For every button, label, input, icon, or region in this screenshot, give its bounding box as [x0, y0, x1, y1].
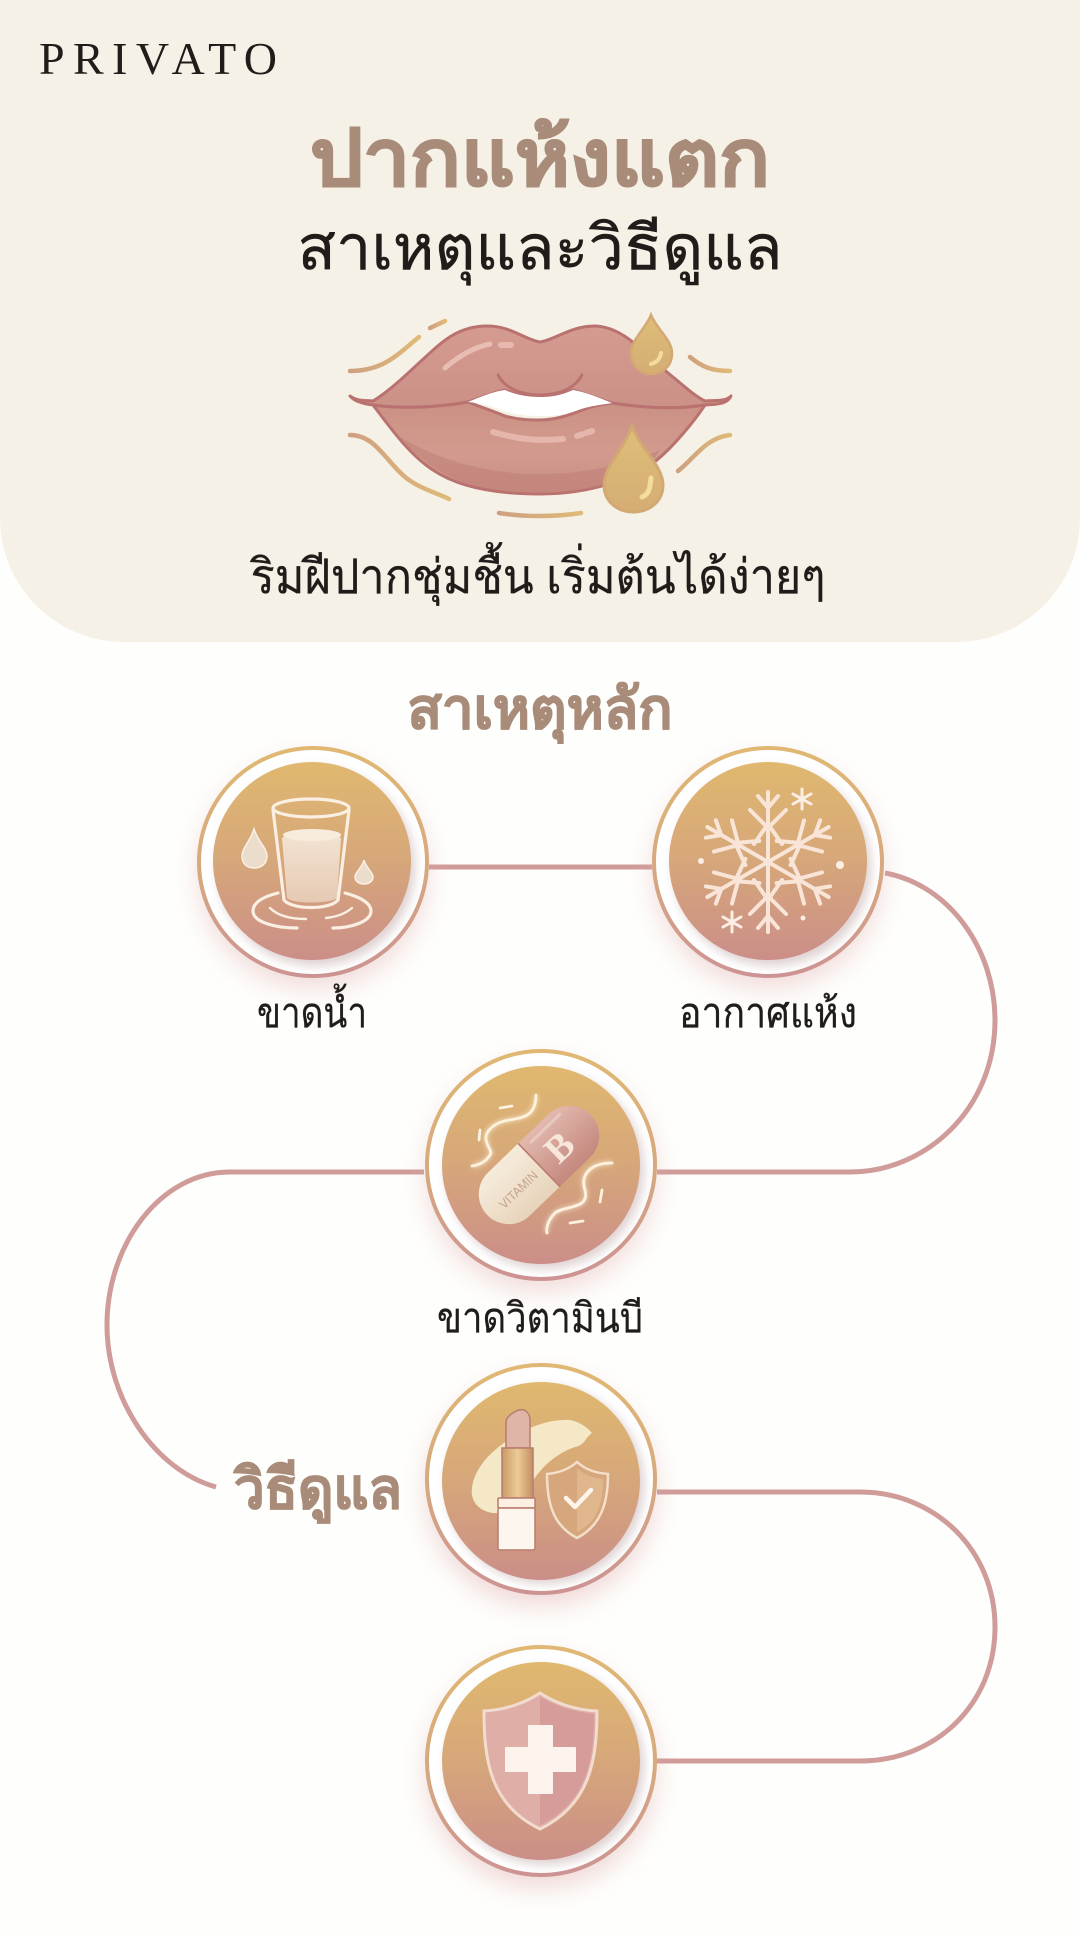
label: vitamin B deficiency: ขาดวิตามินบี [437, 1295, 643, 1341]
icon circle: dry weather [654, 748, 882, 988]
upper lip [350, 326, 731, 408]
drop: lower [604, 426, 663, 512]
cross [506, 1726, 575, 1793]
label: dry weather: อากาศแห้ง [679, 990, 857, 1036]
icon circle: vitamin B deficiency [427, 1051, 655, 1291]
water drops [242, 829, 267, 868]
subtitle: ริมฝีปากชุ่มชื้น เริ่มต้นได้ง่ายๆ [249, 542, 825, 606]
lower lip shade [395, 434, 660, 492]
title: secondary: สาเหตุและวิธีดูแล [298, 214, 782, 285]
mouth opening [468, 390, 612, 416]
balm swatch [472, 1420, 592, 1513]
drop: upper [631, 315, 672, 374]
connector path [107, 867, 995, 1761]
small snowflakes and dots [698, 789, 844, 932]
brand logo: PRIVATO: PRIVATO [39, 33, 277, 84]
title: main: ปากแห้งแตก [310, 114, 770, 202]
icon circle: dehydration [199, 748, 427, 988]
shield with check [547, 1462, 608, 1538]
lower lip [373, 402, 705, 494]
heading: main causes: สาเหตุหลัก [408, 677, 672, 744]
header panel [0, 0, 1080, 642]
icon circle: lip balm and protection [427, 1365, 655, 1605]
glass of water [253, 799, 371, 928]
motion dashes [350, 321, 730, 516]
label: dehydration: ขาดน้ำ [257, 983, 367, 1036]
lipstick [498, 1410, 535, 1550]
icon circle: medical protection [427, 1647, 655, 1887]
vitamin capsule: VITAMIN [496, 1168, 541, 1212]
heading: care: วิธีดูแล [233, 1457, 402, 1524]
shield [484, 1693, 597, 1829]
squiggle lines [472, 1095, 612, 1233]
squiggle glow [472, 1095, 612, 1233]
small water drop [355, 860, 373, 884]
lip details [445, 344, 592, 440]
illustration: lips with oil drops [350, 315, 731, 516]
vitamin capsule [466, 1093, 612, 1237]
vitamin capsule: B [536, 1124, 584, 1172]
snowflake [698, 792, 838, 932]
